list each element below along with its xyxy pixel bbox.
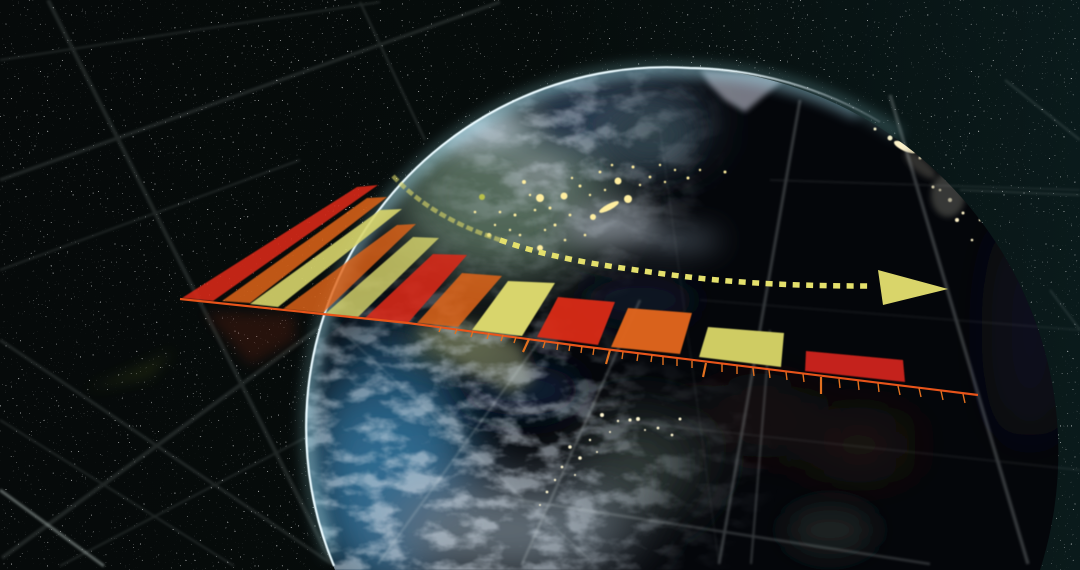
bars: orange bbox=[222, 197, 692, 354]
bar chart timeline bbox=[85, 176, 978, 403]
globe base: dark night side bbox=[300, 60, 1080, 570]
bar trail reflections bbox=[85, 312, 295, 390]
dotted line: faint start bbox=[393, 176, 500, 240]
bright foreground grid line bbox=[0, 490, 104, 566]
dotted line: main run bbox=[500, 240, 872, 286]
cloud cover bbox=[306, 68, 754, 570]
atmosphere edge glow bbox=[305, 67, 860, 545]
city lights: north america bbox=[474, 164, 726, 251]
bars: yellow bbox=[250, 209, 784, 367]
axis ticks bbox=[439, 327, 965, 403]
polar snow patch bbox=[700, 70, 790, 112]
earth globe bbox=[300, 60, 1080, 570]
arrow head bbox=[878, 270, 948, 305]
timeline axis bbox=[180, 299, 978, 395]
city lights: east side limb bbox=[874, 128, 981, 241]
dotted trajectory arrow bbox=[393, 176, 948, 305]
central america land bbox=[412, 325, 535, 395]
globe colour regions bbox=[310, 80, 1060, 570]
globe overlay grid lines bbox=[340, 95, 1080, 564]
bars: red bbox=[182, 185, 905, 382]
city lights: south america bbox=[539, 413, 682, 506]
atmosphere rim bbox=[306, 67, 900, 566]
